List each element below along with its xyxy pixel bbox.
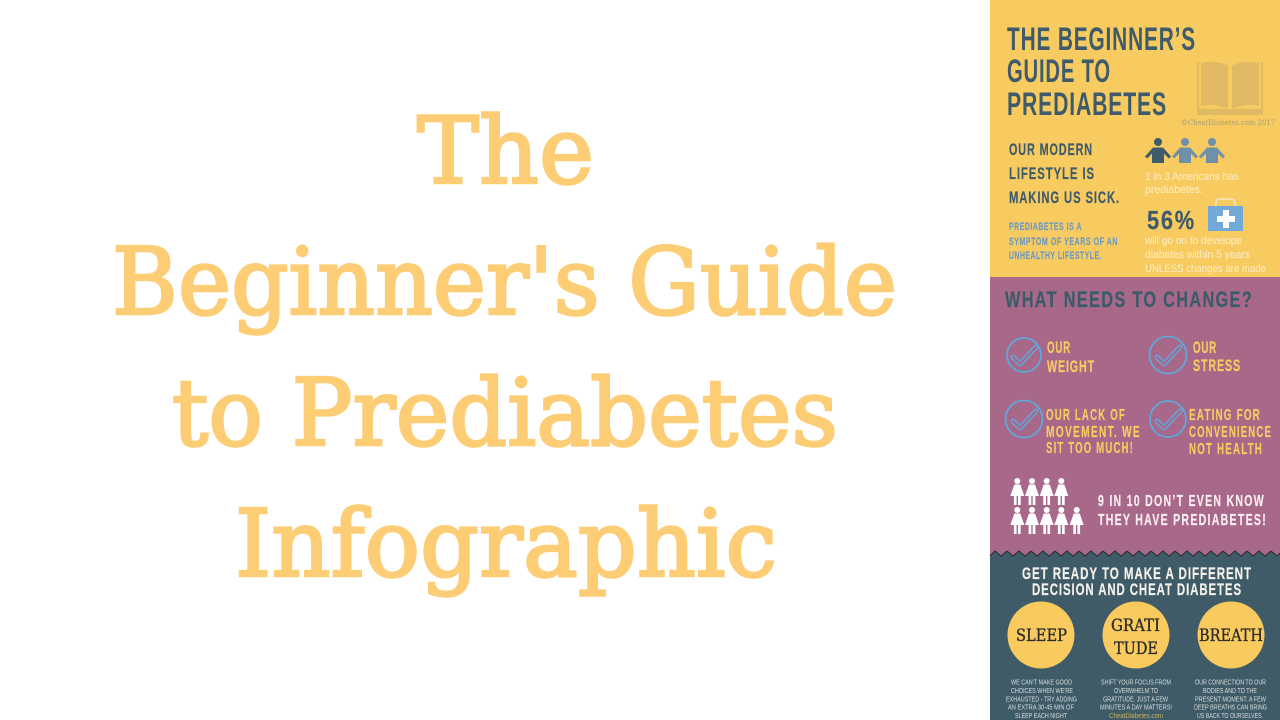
circle: gratitude: TUDE bbox=[1114, 639, 1158, 659]
infographic heading: GUIDE TO bbox=[1007, 53, 1111, 89]
main title: Infographic bbox=[235, 490, 777, 598]
lifestyle statement bbox=[1009, 141, 1120, 207]
text: sleep advice: SLEEP EACH NIGHT bbox=[1015, 713, 1068, 720]
prediabetes symptom note: PREDIABETES IS A bbox=[1009, 221, 1082, 233]
stat: 1 in 3: prediabetes. bbox=[1145, 184, 1203, 196]
prediabetes symptom note: UNHEALTHY LIFESTYLE. bbox=[1009, 250, 1102, 262]
text: breath advice bbox=[1194, 680, 1267, 720]
main title: to Prediabetes bbox=[172, 359, 838, 467]
circle: sleep: SLEEP bbox=[1016, 626, 1067, 646]
main title: The bbox=[417, 97, 594, 205]
text: sleep advice: EXHAUSTED - TRY ADDING bbox=[1006, 696, 1077, 704]
item: our weight: OUR bbox=[1047, 339, 1071, 357]
item: lack of movement: SIT TOO MUCH! bbox=[1046, 440, 1134, 457]
prediabetes symptom note bbox=[1009, 221, 1118, 262]
circle: breath: BREATH bbox=[1199, 626, 1263, 646]
panel: cheat diabetes decisions bbox=[990, 551, 1280, 720]
text: gratitude advice: MINUTES A DAY MATTERS! bbox=[1100, 704, 1172, 712]
item: our weight bbox=[1007, 338, 1095, 376]
item: lack of movement: OUR LACK OF bbox=[1046, 407, 1126, 424]
lifestyle statement: LIFESTYLE IS bbox=[1009, 165, 1095, 183]
main title bbox=[112, 97, 897, 598]
icon: open book bbox=[1197, 62, 1263, 115]
panel: infographic thumbnail intro bbox=[990, 0, 1280, 277]
circle: sleep bbox=[1008, 602, 1074, 668]
stat: diabetes within 5 years: UNLESS changes are made bbox=[1145, 263, 1266, 275]
item: lack of movement bbox=[1006, 400, 1141, 457]
item: our stress bbox=[1150, 336, 1241, 375]
text: breath advice: BODIES AND TO THE bbox=[1203, 688, 1257, 695]
text: sleep advice bbox=[1006, 680, 1077, 720]
stat: 1 in 3: 1 in 3 Americans has bbox=[1145, 171, 1239, 183]
circle: gratitude: GRATI bbox=[1111, 616, 1160, 636]
lifestyle statement: OUR MODERN bbox=[1009, 141, 1093, 159]
text: gratitude advice: GRATITUDE. JUST A FEW bbox=[1103, 696, 1168, 704]
icon: ten women bbox=[1010, 478, 1084, 534]
text: gratitude advice bbox=[1100, 680, 1172, 720]
section heading bbox=[1022, 565, 1252, 599]
text: sleep advice: AN EXTRA 30-45 MIN OF bbox=[1008, 704, 1074, 712]
text: gratitude advice: OVERWHELM TO bbox=[1114, 688, 1158, 695]
icon: three people bbox=[1145, 138, 1225, 163]
main title: Beginner's Guide bbox=[112, 228, 897, 336]
item: our weight: WEIGHT bbox=[1047, 358, 1095, 376]
stat: diabetes within 5 years: diabetes within 5 years bbox=[1145, 249, 1250, 261]
item: eating for convenience bbox=[1150, 401, 1272, 458]
circle: gratitude bbox=[1102, 602, 1170, 668]
panel: what needs to change bbox=[990, 277, 1280, 556]
prediabetes symptom note: SYMPTOM OF YEARS OF AN bbox=[1009, 236, 1118, 248]
lifestyle statement: MAKING US SICK. bbox=[1009, 189, 1120, 207]
icon: first aid kit bbox=[1208, 199, 1243, 231]
stat: diabetes within 5 years: will go on to develope bbox=[1144, 235, 1242, 247]
item: our stress: OUR bbox=[1193, 339, 1217, 357]
stat: diabetes within 5 years bbox=[1144, 235, 1266, 275]
stat: 1 in 3 bbox=[1145, 171, 1239, 196]
infographic heading: PREDIABETES bbox=[1007, 86, 1167, 122]
text: sleep advice: CHOICES WHEN WE’RE bbox=[1011, 688, 1073, 695]
text: gratitude advice: SHIFT YOUR FOCUS FROM bbox=[1101, 680, 1171, 686]
stat: 56 percent: 56% bbox=[1147, 205, 1196, 235]
text: sleep advice: WE CAN’T MAKE GOOD bbox=[1011, 680, 1072, 686]
stat: 9 in 10 bbox=[1098, 493, 1267, 529]
item: our stress: STRESS bbox=[1193, 357, 1241, 375]
infographic heading bbox=[1007, 21, 1196, 122]
item: lack of movement: MOVEMENT. WE bbox=[1046, 424, 1141, 441]
text: gratitude advice: CheatDiabetes.com bbox=[1109, 713, 1163, 720]
circle: breath bbox=[1198, 602, 1264, 668]
